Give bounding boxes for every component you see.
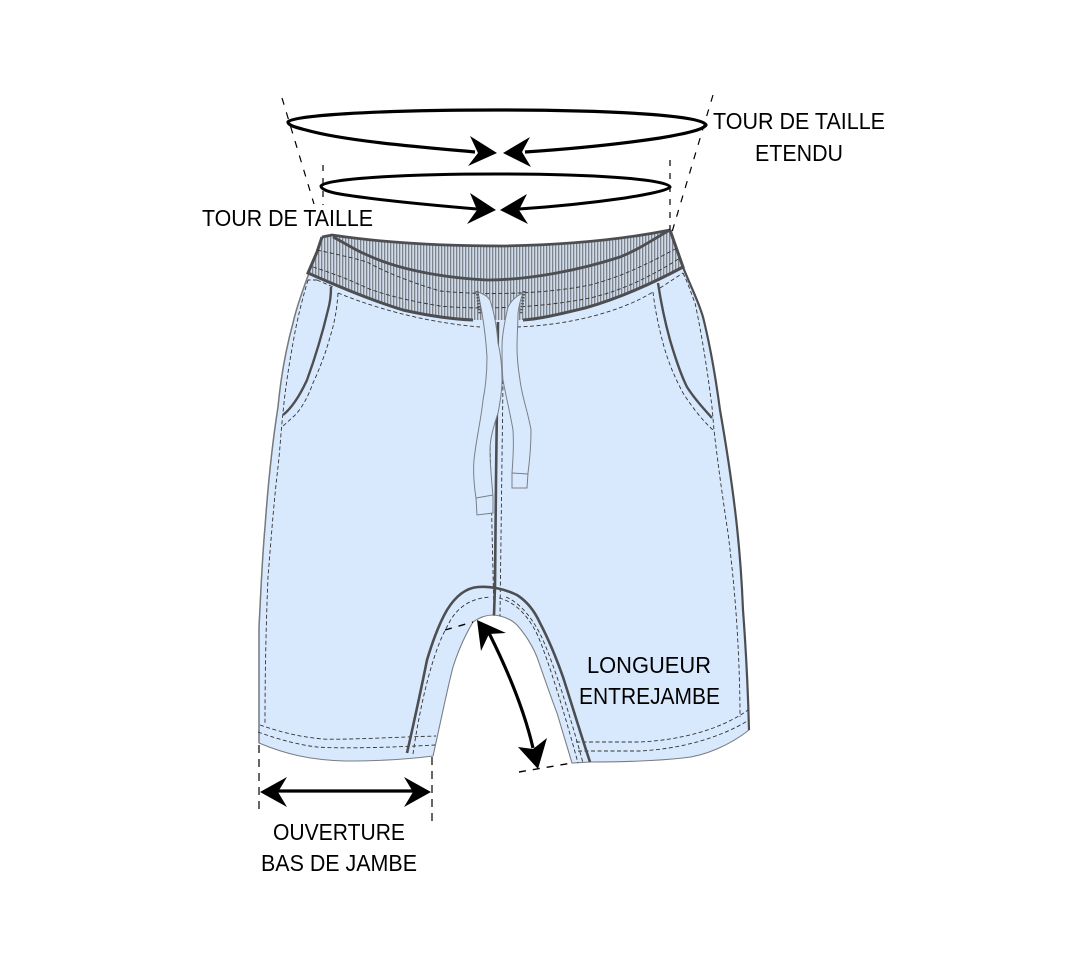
drawstring right — [502, 293, 531, 488]
label: waist: TOUR DE TAILLE — [202, 205, 373, 231]
topstitching — [258, 273, 749, 763]
arrowheads — [467, 193, 528, 224]
shorts body — [259, 267, 749, 763]
guide dashes — [445, 622, 572, 772]
arrowheads — [468, 136, 531, 167]
left side seam — [259, 273, 309, 743]
drawstring left — [474, 292, 502, 515]
label: stretched waist: TOUR DE TAILLE — [713, 108, 885, 134]
right pocket — [658, 283, 712, 418]
shorts illustration — [258, 230, 749, 763]
measure: leg opening — [259, 745, 432, 826]
waist ellipse — [321, 174, 670, 209]
guide dashes — [259, 745, 432, 826]
measure: waist — [321, 160, 670, 230]
left pocket — [283, 287, 331, 415]
arrowheads — [260, 777, 431, 807]
waistband outline — [308, 230, 683, 320]
arrowheads — [477, 620, 547, 769]
label: inseam: LONGUEUR — [587, 652, 711, 678]
waistband ribbing — [308, 230, 683, 320]
drawstring tabs — [476, 473, 528, 498]
bartacks — [477, 291, 524, 314]
guide dashes — [282, 95, 713, 232]
leg opening arrow line — [278, 789, 413, 793]
label: leg opening: OUVERTURE — [273, 819, 405, 845]
label: leg opening: BAS DE JAMBE — [261, 850, 417, 876]
stretched waist ellipse — [288, 110, 706, 152]
right side seam — [683, 267, 749, 730]
waistband stitching — [313, 248, 680, 308]
inseam arrow line — [489, 633, 533, 748]
crotch seam — [407, 587, 590, 762]
fly seam — [494, 322, 498, 615]
label: stretched waist: ETENDU — [755, 140, 843, 166]
measure: stretched waist — [282, 95, 713, 232]
label: inseam: ENTREJAMBE — [579, 683, 720, 709]
measure: inseam — [445, 620, 572, 772]
guide dashes — [323, 160, 670, 230]
